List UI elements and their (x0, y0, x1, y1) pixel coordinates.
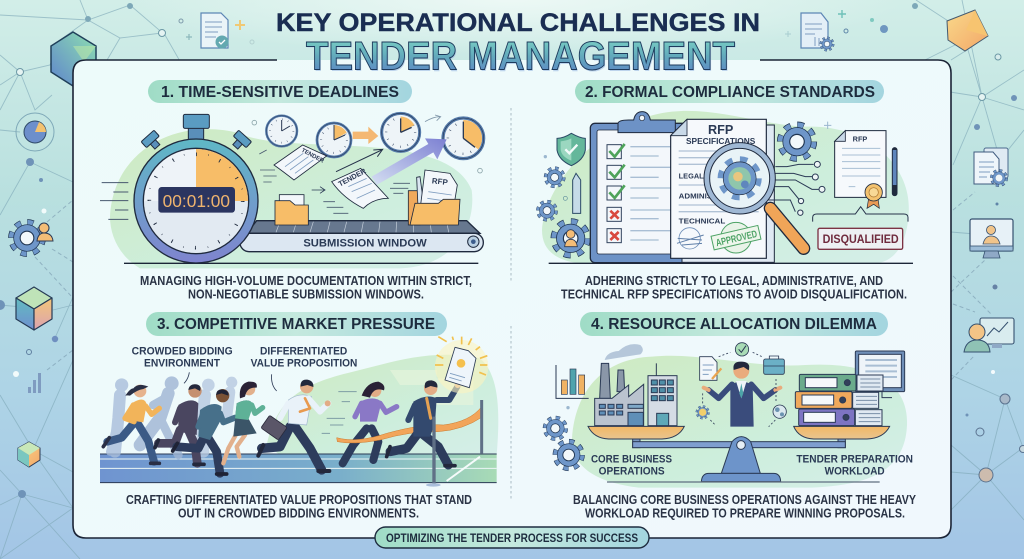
illustration: stopwatch and conveyor (100, 113, 484, 268)
arrows (252, 115, 482, 213)
illustration: balance scale (545, 343, 913, 488)
title: TENDER MANAGEMENT (307, 34, 736, 80)
caption 1: NON-NEGOTIABLE SUBMISSION WINDOWS. (188, 288, 424, 302)
clocks (266, 113, 484, 159)
small RFP certificate (835, 131, 895, 208)
stopwatch (134, 114, 258, 263)
icon: pentagon gem (947, 10, 988, 51)
panel: resource allocation dilemma (545, 312, 917, 520)
finish ribbon (337, 407, 483, 443)
disqualified stamp: DISQUALIFIED (823, 232, 899, 246)
conveyor belt (240, 221, 483, 252)
magnifying glass (704, 143, 804, 248)
conveyor belt: SUBMISSION WINDOW (303, 238, 428, 250)
runner: winner with document (387, 380, 461, 466)
businessman (704, 362, 780, 427)
callout labels: ENVIRONMENT (144, 358, 220, 370)
RFP specification document: TECHNICAL (679, 216, 726, 225)
caption 4: BALANCING CORE BUSINESS OPERATIONS AGAINST THE HEAVY (573, 493, 917, 507)
icon: pie chart (16, 113, 54, 151)
caption 2: ADHERING STRICTLY TO LEGAL, ADMINISTRATIVE, AND (585, 274, 883, 288)
caption 4: WORKLOAD REQUIRED TO PREPARE WINNING PROPOSALS. (585, 506, 905, 520)
finish posts (426, 400, 482, 487)
small RFP certificate: RFP (853, 135, 867, 144)
stamps: APPROVED (715, 229, 758, 249)
heading pill 4: 4. RESOURCE ALLOCATION DILEMMA (591, 316, 877, 333)
runner: yellow woman (103, 385, 159, 463)
caption 3: CRAFTING DIFFERENTIATED VALUE PROPOSITIONS THAT STAND (126, 493, 472, 507)
caption 1: MANAGING HIGH-VOLUME DOCUMENTATION WITHIN STRICT, (140, 274, 472, 288)
folders (275, 170, 460, 225)
left gears (538, 122, 831, 255)
icon: documents with gear right (974, 148, 1008, 185)
binders and monitor (795, 351, 905, 426)
RFP specification document: RFP (708, 123, 734, 137)
winning proposal document (435, 337, 488, 393)
runner: purple woman (343, 382, 397, 463)
top right gear (780, 125, 814, 159)
illustration: compliance checklist and RFP (538, 111, 913, 263)
heading pill 3 (146, 312, 447, 336)
caption 2 (561, 274, 907, 302)
icon: person with chart (964, 318, 1014, 352)
scale pans and beam (588, 426, 890, 482)
heading pill 4 (580, 312, 888, 336)
icon: small colour hexagon (18, 442, 40, 467)
heading pill 3: 3. COMPETITIVE MARKET PRESSURE (157, 316, 435, 333)
caption 1 (140, 274, 472, 302)
scale labels: WORKLOAD (825, 465, 885, 477)
icon: monitor with person (970, 219, 1013, 258)
background runner silhouettes (110, 376, 237, 455)
scale labels: OPERATIONS (599, 465, 665, 477)
circuit lines (765, 161, 825, 215)
heading pill 2: 2. FORMAL COMPLIANCE STANDARDS (585, 84, 875, 101)
callout labels: VALUE PROPOSITION (251, 358, 357, 370)
runner: dark suit man (155, 384, 204, 464)
icon: gear with person (11, 222, 53, 254)
icon: document gear top (785, 10, 848, 50)
flying documents: TENDER (337, 166, 368, 188)
scale labels (591, 454, 913, 477)
caption 3: OUT IN CROWDED BIDDING ENVIRONMENTS. (178, 506, 419, 520)
caption 2: TECHNICAL RFP SPECIFICATIONS TO AVOID DISQUALIFICATION. (561, 288, 907, 302)
icon: hexagon gem top left (51, 32, 96, 86)
RFP specification document: SPECIFICATIONS (686, 137, 756, 146)
speed lines (322, 392, 357, 433)
caption 4 (573, 493, 917, 520)
title (276, 9, 760, 80)
title: TENDER MANAGEMENT (306, 34, 735, 78)
heading pill 1 (148, 80, 412, 103)
runner: white shirt man with briefcase (258, 380, 331, 471)
heading pill 1: 1. TIME-SENSITIVE DEADLINES (161, 84, 399, 101)
panel: formal compliance standards (538, 80, 913, 302)
flying documents (274, 145, 388, 208)
callout labels: CROWDED BIDDING (132, 345, 233, 357)
folders: RFP (431, 176, 449, 187)
footer banner: OPTIMIZING THE TENDER PROCESS FOR SUCCESS (386, 533, 638, 545)
cloud (605, 344, 643, 360)
gears (545, 418, 582, 468)
panel: time-sensitive deadlines (100, 80, 484, 302)
caption 3 (126, 493, 472, 520)
panel: main card (73, 60, 951, 538)
runner: green jacket woman (223, 382, 263, 463)
RFP specification document (671, 119, 774, 262)
stopwatch: 00:01:00 (163, 191, 230, 211)
title: KEY OPERATIONAL CHALLENGES IN (276, 9, 760, 37)
panel: competitive market pressure (100, 312, 498, 520)
mini bar chart (556, 365, 589, 409)
icon: colour cube (16, 287, 52, 330)
flying documents: TENDER (300, 148, 325, 165)
stamps (677, 222, 761, 253)
icon: document check top (179, 13, 254, 48)
callout labels: DIFFERENTIATED (260, 345, 348, 357)
callout labels (132, 345, 357, 391)
illustration: race to finish line (100, 337, 498, 487)
clipboard checklist (590, 112, 687, 263)
factory and office (595, 363, 677, 426)
icon: bar chart small (28, 373, 41, 393)
footer banner (375, 527, 649, 548)
runner: teal man (173, 389, 235, 474)
disqualified stamp (813, 207, 908, 249)
RFP specification document: LEGAL (679, 171, 704, 180)
RFP specification document: ADMINISTRATIVE (679, 191, 745, 200)
scale labels: TENDER PREPARATION (796, 454, 913, 466)
shield (557, 133, 585, 166)
floating icons (697, 343, 786, 427)
scale labels: CORE BUSINESS (591, 454, 672, 466)
running track (100, 454, 497, 483)
